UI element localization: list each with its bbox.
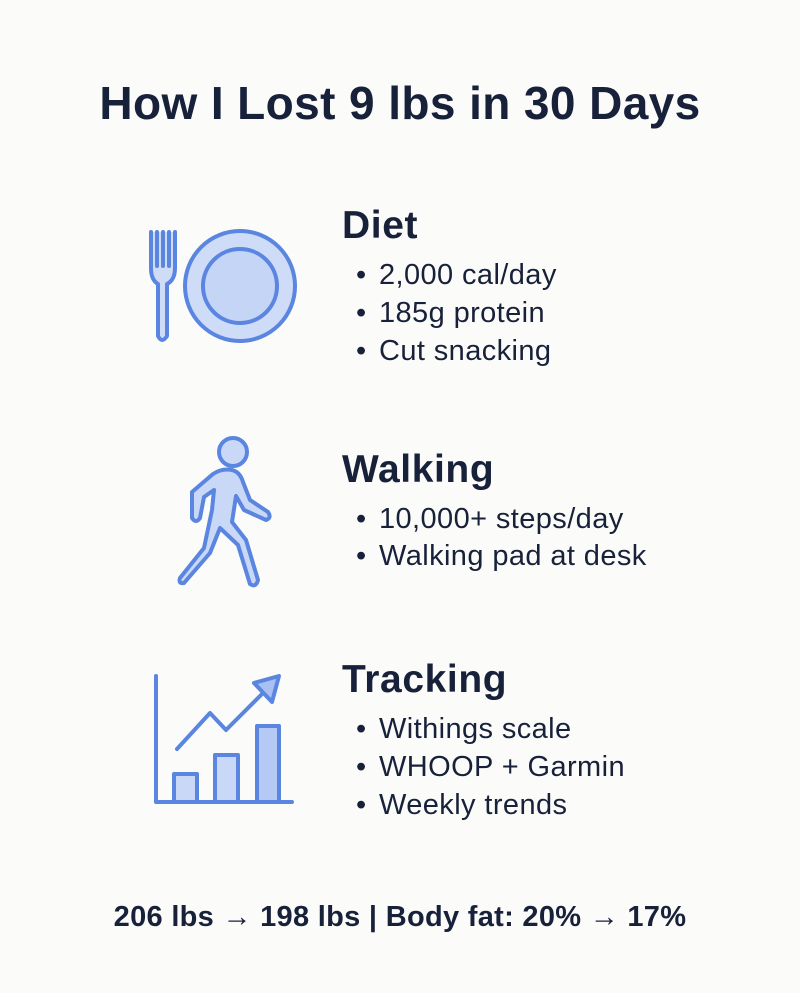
footer stats: 206 lbs → 198 lbs | Body fat: 20% → 17%: [114, 901, 686, 933]
text: tracking bullets: •: [356, 713, 367, 745]
text: tracking bullets: Withings scale: [379, 713, 572, 745]
text: diet bullets: •: [356, 297, 367, 329]
text: walking bullets: [356, 503, 647, 572]
text: tracking bullets: WHOOP + Garmin: [379, 751, 625, 783]
icon: bar chart with arrow: [156, 676, 292, 802]
icon: walking person: [180, 438, 270, 585]
text: walking bullets: 10,000+ steps/day: [379, 503, 624, 535]
text: diet bullets: •: [356, 335, 367, 367]
text: walking bullets: •: [356, 540, 367, 572]
icon: fork and plate: [151, 231, 295, 341]
heading: Diet: Diet: [342, 204, 418, 247]
heading: Walking: Walking: [342, 448, 494, 491]
title: How I Lost 9 lbs in 30 Days: [99, 77, 701, 129]
text: tracking bullets: [356, 713, 625, 821]
text: walking bullets: Walking pad at desk: [379, 540, 647, 572]
heading: Tracking: Tracking: [342, 658, 507, 701]
text: diet bullets: Cut snacking: [379, 335, 551, 367]
text: diet bullets: •: [356, 259, 367, 291]
text: diet bullets: 185g protein: [379, 297, 545, 329]
text: walking bullets: •: [356, 503, 367, 535]
text: diet bullets: 2,000 cal/day: [379, 259, 557, 291]
text: tracking bullets: Weekly trends: [379, 789, 567, 821]
text: diet bullets: [356, 259, 557, 367]
text: tracking bullets: •: [356, 751, 367, 783]
text: tracking bullets: •: [356, 789, 367, 821]
